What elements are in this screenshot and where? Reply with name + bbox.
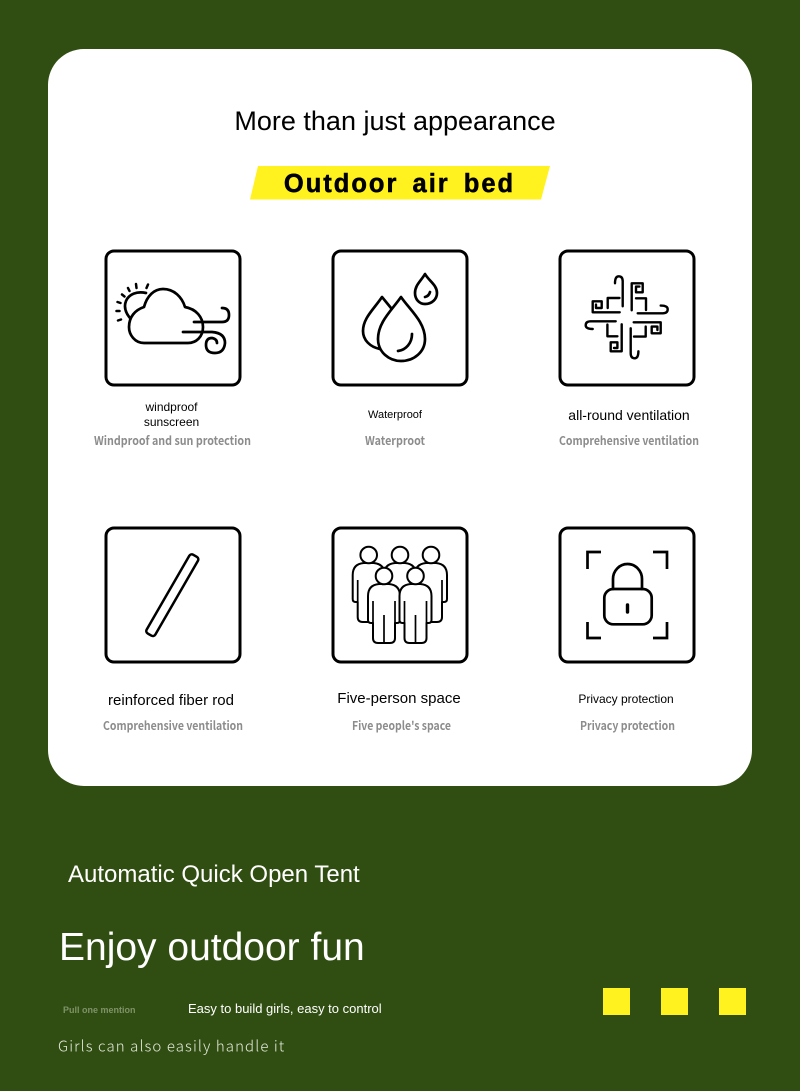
heading: Automatic Quick Open Tent: Automatic Quick Open Tent (68, 861, 360, 888)
tagline: Easy to build girls, easy to control (188, 1001, 382, 1016)
icon: five people (353, 547, 447, 643)
label: all-round ventilation (568, 407, 690, 423)
caption: Girls can also easily handle it (58, 1036, 285, 1056)
title: More than just appearance (234, 106, 556, 136)
icon: cloud, sun and wind (116, 284, 229, 353)
sublabel: Five people's space (352, 717, 451, 734)
icon: padlock (588, 552, 667, 638)
panel: features (48, 49, 752, 786)
icon: fiber rod (145, 553, 199, 637)
feature: waterproof (333, 251, 467, 449)
feature: all-round ventilation (559, 251, 699, 449)
label: Waterproof (368, 409, 423, 421)
banner: Outdoor air bed (250, 166, 550, 200)
banner: Outdoor air bed: Outdoor air bed (284, 170, 515, 198)
label: Privacy protection (578, 692, 674, 706)
sublabel: Comprehensive ventilation (103, 717, 243, 734)
icon: ventilation swirls (586, 276, 668, 358)
icon: water drops (363, 274, 437, 361)
heading: Enjoy outdoor fun: Enjoy outdoor fun (59, 926, 365, 969)
feature: privacy protection (560, 528, 694, 734)
feature: windproof sunscreen (94, 251, 251, 449)
sublabel: Privacy protection (580, 717, 675, 734)
feature: reinforced fiber rod (103, 528, 243, 734)
sublabel: Windproof and sun protection (94, 432, 251, 449)
sublabel: Comprehensive ventilation (559, 432, 699, 449)
label: reinforced fiber rod (108, 692, 234, 709)
small tag: Pull one mention (63, 1005, 136, 1015)
label: windproof (144, 400, 198, 414)
label: Five-person space (337, 690, 461, 707)
sublabel: Waterproot (365, 432, 425, 449)
decorative yellow squares (603, 988, 746, 1015)
feature: five-person space (333, 528, 467, 734)
label line 2: sunscreen (144, 415, 199, 429)
